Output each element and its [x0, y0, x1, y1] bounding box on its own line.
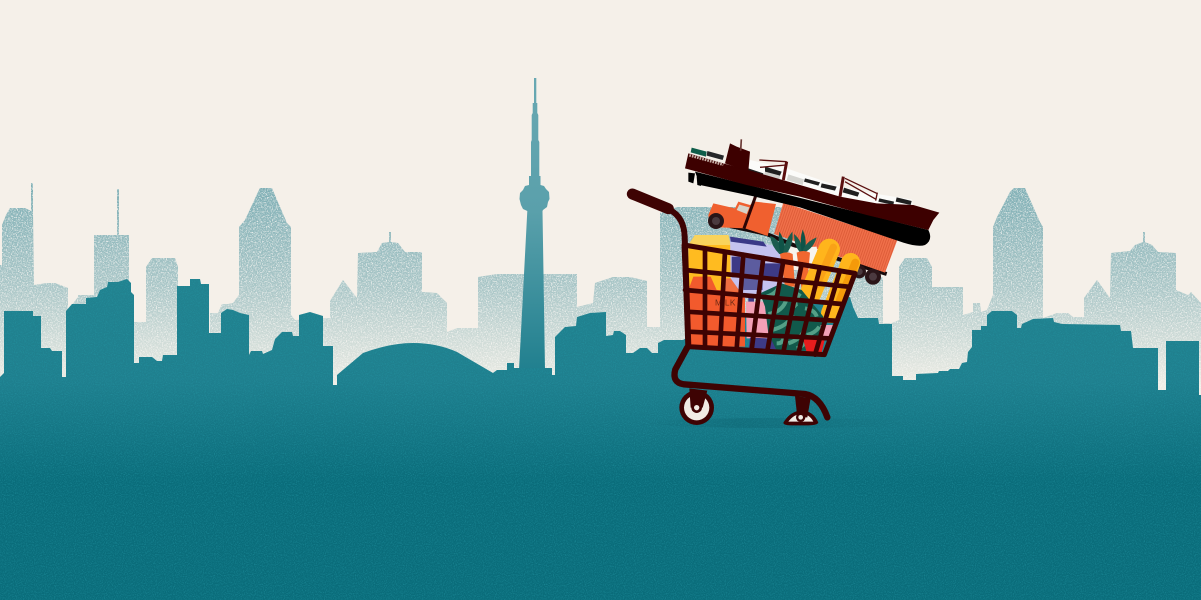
baguettes	[811, 247, 855, 313]
watermelon	[760, 283, 823, 351]
deck rail	[689, 155, 723, 165]
containers on deck	[748, 160, 913, 206]
upper hull	[685, 153, 939, 230]
front skyline and ground	[0, 270, 1201, 600]
shopping cart with groceries, truck and ship	[632, 139, 939, 425]
carrots	[770, 229, 817, 290]
container	[774, 203, 897, 273]
back skyline silhouette	[0, 183, 1201, 384]
chassis and rear wheels	[862, 267, 887, 278]
cart shadow on ground	[645, 418, 915, 428]
basket grid	[705, 248, 840, 355]
deck cranes	[783, 162, 843, 197]
bridge tower	[725, 143, 750, 172]
white wrap behind carrots	[788, 247, 820, 270]
yellow box	[688, 235, 731, 292]
handle post	[670, 210, 688, 347]
milk carton	[688, 277, 745, 347]
lower hull	[695, 172, 930, 246]
truck with shipping container	[708, 196, 897, 285]
stern rudder	[688, 173, 695, 183]
truck cab	[708, 202, 776, 236]
apple	[803, 336, 825, 353]
container ship	[685, 139, 939, 246]
stern cargo	[691, 148, 707, 157]
lower frame	[674, 347, 827, 417]
CN tower	[519, 78, 550, 370]
groceries	[688, 229, 855, 353]
basket outline	[684, 245, 855, 355]
milk carton: MILK	[715, 297, 736, 307]
cereal box	[730, 237, 783, 351]
rear wheel	[783, 396, 818, 425]
front wheel	[679, 388, 714, 425]
front truck wheel	[708, 213, 724, 229]
cart frame	[632, 194, 855, 417]
pink package	[820, 325, 833, 337]
handle grip	[632, 194, 668, 209]
